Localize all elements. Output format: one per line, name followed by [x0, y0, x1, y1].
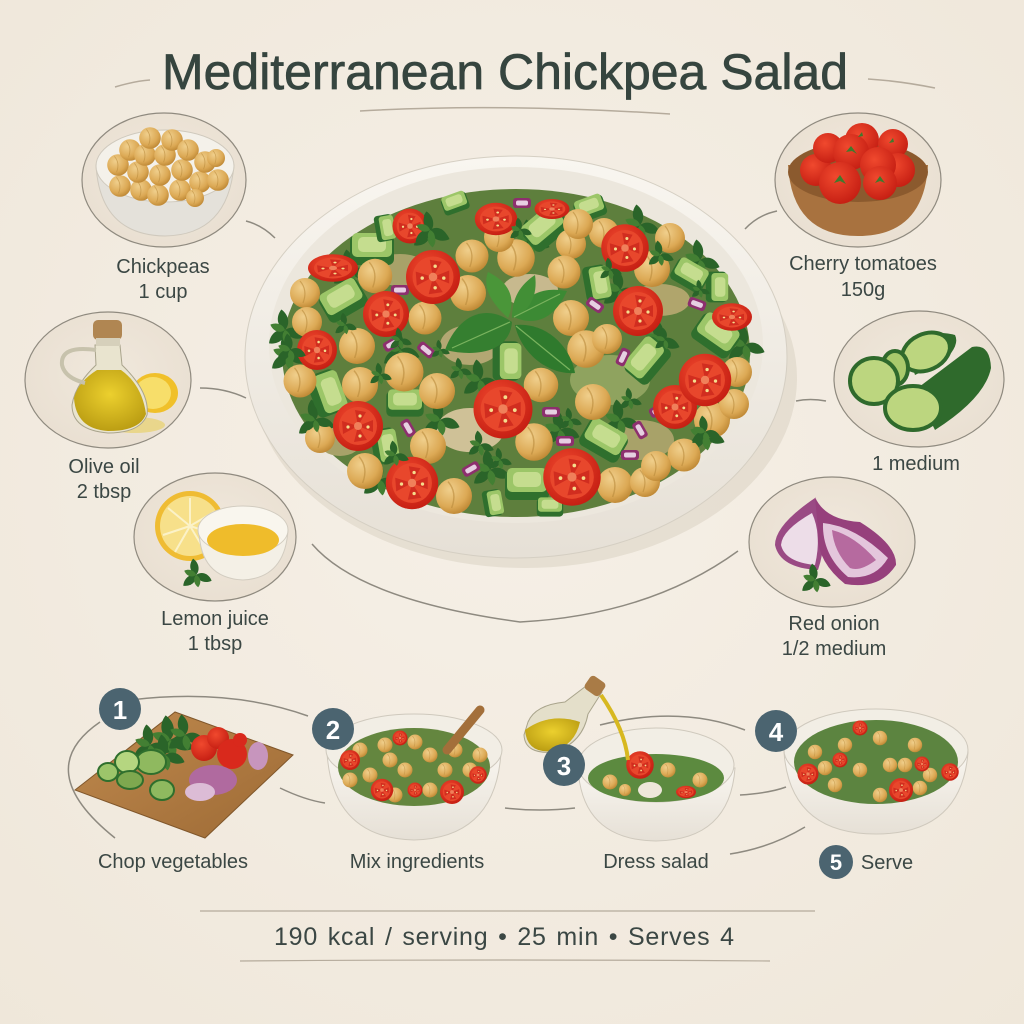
cherry tomato halves — [297, 199, 752, 509]
circle frame — [834, 311, 1004, 447]
title — [115, 44, 935, 114]
salad base — [282, 189, 750, 517]
label: 2 tbsp — [77, 481, 131, 503]
label: 1/2 medium — [782, 638, 886, 660]
ingredient: cucumber — [834, 311, 1004, 475]
red onion pieces — [382, 198, 707, 478]
label: Olive oil — [68, 456, 140, 478]
icon: herb sprig — [800, 563, 832, 594]
bowl — [326, 714, 502, 840]
bowl — [578, 728, 735, 841]
ingredient: lemon juice — [134, 473, 296, 655]
icon: lemon half — [155, 491, 225, 561]
number badge 5: 5 — [830, 850, 842, 875]
circle frame — [134, 473, 296, 601]
icon: bowl of chickpeas — [96, 127, 234, 236]
label: Dress salad — [603, 851, 709, 873]
label: 150g — [841, 279, 885, 301]
herbs — [266, 204, 766, 498]
step 3: dress salad — [524, 674, 735, 873]
herb flecks on top — [275, 211, 722, 471]
label — [161, 608, 269, 655]
label: 1 tbsp — [188, 633, 242, 655]
basil garnish — [445, 272, 575, 373]
icon: oil bottle — [62, 320, 147, 433]
icon: wooden spoon — [447, 710, 480, 750]
label — [782, 613, 886, 660]
label: Serve — [861, 852, 913, 874]
label — [116, 256, 210, 303]
label: Chickpeas — [116, 256, 210, 278]
step 4: finished bowl — [755, 709, 968, 834]
main salad bowl — [245, 156, 797, 568]
icon: dish of juice — [198, 506, 288, 580]
icon: onion halves — [775, 497, 896, 585]
icon: wooden bowl of tomatoes — [788, 123, 928, 236]
ingredient: olive oil — [25, 312, 191, 503]
number badge 4: 4 — [769, 717, 784, 747]
nutrition footer: 190 kcal / serving • 25 min • Serves 4 — [274, 923, 734, 951]
chickpeas — [284, 209, 752, 514]
label: Red onion — [788, 613, 880, 635]
number badge 1: 1 — [113, 695, 127, 725]
cutting board — [75, 712, 293, 838]
connector lines — [68, 211, 826, 854]
number badge 2: 2 — [326, 715, 340, 745]
ingredient: red onion — [749, 477, 915, 660]
bowl inner — [269, 167, 763, 523]
circle frame — [775, 113, 941, 247]
label — [789, 253, 937, 301]
circle frame — [749, 477, 915, 607]
number badge 2 — [312, 708, 354, 750]
circle frame — [82, 113, 246, 247]
ingredient: chickpeas — [82, 113, 246, 303]
step 1: chop vegetables — [75, 688, 293, 873]
title: Mediterranean Chickpea Salad — [162, 44, 848, 100]
base texture patches — [318, 254, 690, 460]
step 5: serve — [819, 845, 913, 879]
nutrition footer — [200, 910, 815, 961]
label: Chop vegetables — [98, 851, 248, 873]
number badge 3 — [543, 744, 585, 786]
label: 1 medium — [872, 453, 960, 475]
label: Mix ingredients — [350, 851, 484, 873]
icon: lemon slice — [105, 373, 178, 433]
bowl body — [245, 156, 787, 558]
cucumber pieces — [304, 189, 743, 518]
label: Cherry tomatoes — [789, 253, 937, 275]
chopped vegetables — [98, 714, 268, 801]
label: 1 cup — [139, 281, 187, 303]
icon: oil bottle pouring — [524, 674, 628, 760]
ingredient: cherry tomatoes — [775, 113, 941, 301]
number badge 3: 3 — [557, 751, 571, 781]
bowl — [784, 709, 968, 834]
label — [68, 456, 140, 503]
label: Lemon juice — [161, 608, 269, 630]
icon: cucumbers — [850, 325, 991, 430]
step 2: mix ingredients — [312, 708, 502, 873]
icon: herb sprig — [181, 558, 213, 589]
number badge 4 — [755, 710, 797, 752]
circle frame — [25, 312, 191, 448]
number badge 1 — [99, 688, 141, 730]
